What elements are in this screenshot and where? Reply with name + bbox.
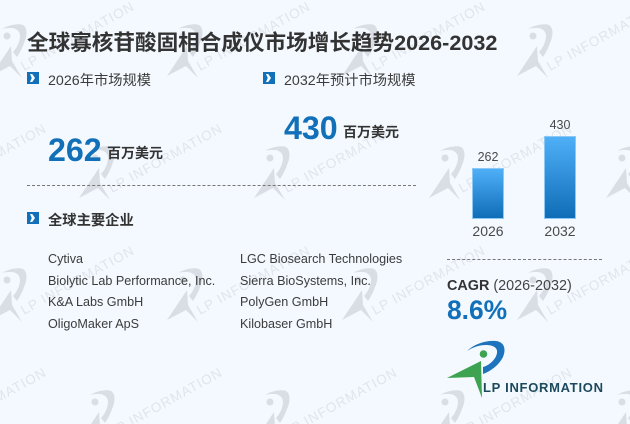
company list, left column: Cytiva bbox=[48, 252, 83, 266]
background watermark pattern: LP INFORMATION bbox=[194, 0, 313, 74]
icon: 2026 bullet bbox=[27, 72, 39, 84]
company list, left column: Biolytic Lab Performance, Inc. bbox=[48, 274, 215, 288]
CAGR value: 8.6% bbox=[447, 295, 507, 325]
panel: 2032 market size bbox=[263, 72, 415, 146]
background watermark pattern: LP INFORMATION bbox=[456, 121, 575, 196]
company list, left column: K&A Labs GmbH bbox=[48, 295, 143, 309]
unit: 2032: 百万美元 bbox=[343, 124, 399, 140]
value: 262: 262 bbox=[48, 132, 102, 168]
company list, right column: PolyGen GmbH bbox=[240, 295, 328, 309]
value: 430: 430 bbox=[284, 110, 338, 146]
background watermark pattern: LP INFORMATION bbox=[281, 121, 400, 196]
heading: major companies: 全球主要企业 bbox=[48, 213, 134, 229]
bar chart: 430 bbox=[550, 118, 570, 132]
title: 全球寡核苷酸固相合成仪市场增长趋势2026-2032 bbox=[27, 30, 497, 55]
bar chart: 262 bbox=[478, 150, 498, 164]
unit: 2026: 百万美元 bbox=[107, 145, 163, 161]
label: 2032 market size: 2032年预计市场规模 bbox=[284, 73, 415, 89]
company list, right column bbox=[240, 252, 402, 331]
label: 2026 market size: 2026年市场规模 bbox=[48, 73, 151, 89]
background watermark pattern: LP INFORMATION bbox=[194, 243, 313, 318]
background watermark pattern: LP INFORMATION bbox=[369, 0, 488, 74]
background watermark pattern: LP INFORMATION bbox=[106, 121, 225, 196]
company list, right column: LGC Biosearch Technologies bbox=[240, 252, 402, 266]
CAGR label: CAGR (2026-2032) bbox=[447, 278, 572, 294]
logo: LP Information: LP INFORMATION bbox=[483, 380, 603, 395]
CAGR block bbox=[447, 278, 572, 325]
company list, left column: OligoMaker ApS bbox=[48, 317, 139, 331]
background watermark pattern: LP INFORMATION bbox=[18, 243, 137, 318]
icon: companies bullet bbox=[27, 212, 39, 224]
bar chart: 2032 bbox=[544, 223, 576, 239]
panel: 2026 market size bbox=[27, 72, 163, 168]
panel: major companies bbox=[27, 212, 402, 331]
bar chart: 2026 bbox=[472, 223, 504, 239]
company list, right column: Kilobaser GmbH bbox=[240, 317, 332, 331]
company list, right column: Sierra BioSystems, Inc. bbox=[240, 274, 371, 288]
icon: 2032 bullet bbox=[263, 72, 275, 84]
background watermark pattern: LP INFORMATION bbox=[369, 243, 488, 318]
company list, left column bbox=[48, 252, 215, 331]
background watermark pattern: LP INFORMATION bbox=[18, 0, 137, 74]
